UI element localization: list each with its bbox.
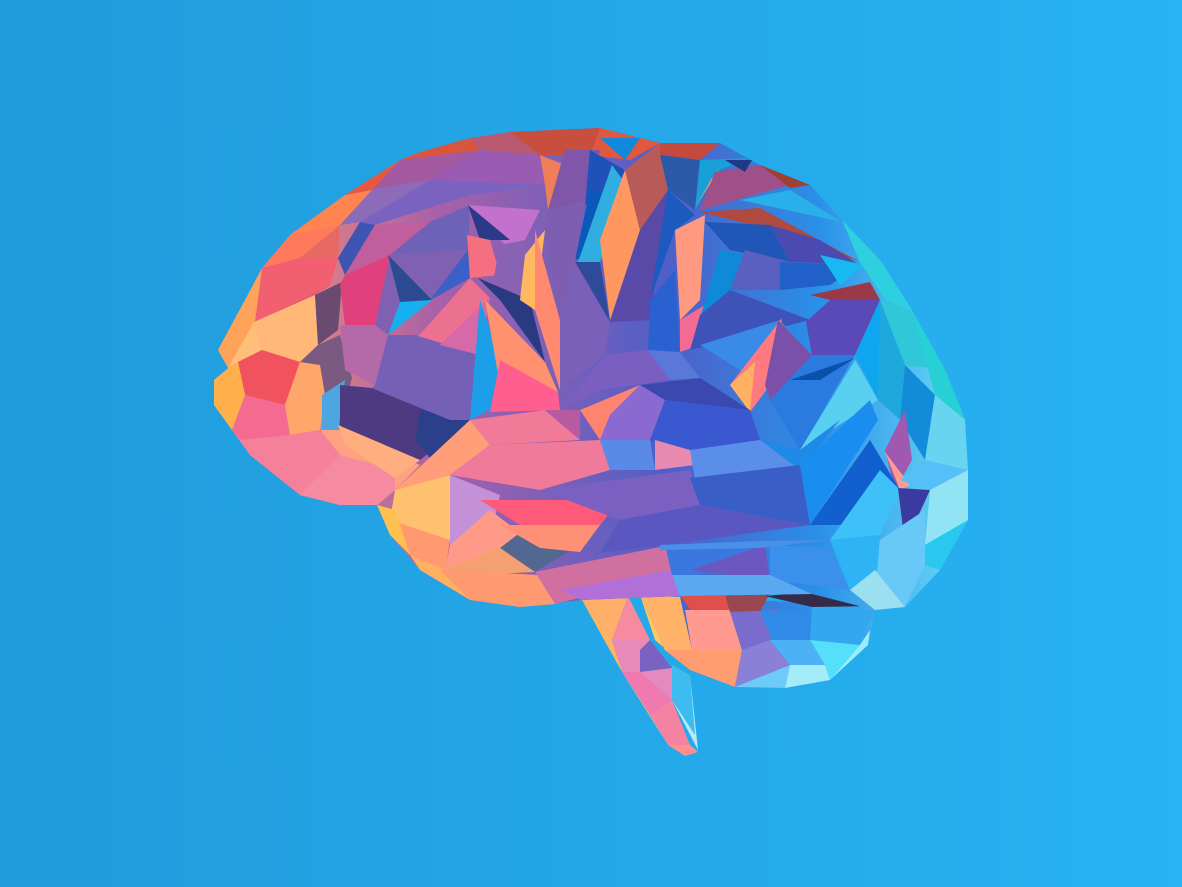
lower temporal band <box>377 505 905 610</box>
parietal lobes <box>340 205 560 420</box>
brain <box>214 128 968 756</box>
cerebellum <box>640 592 875 688</box>
brain stem <box>582 596 698 756</box>
central sulci <box>510 128 810 410</box>
temporal lobe <box>390 378 968 607</box>
brain silhouette <box>214 128 968 610</box>
frontal lobe <box>214 132 545 505</box>
right upper lobes <box>690 190 968 490</box>
